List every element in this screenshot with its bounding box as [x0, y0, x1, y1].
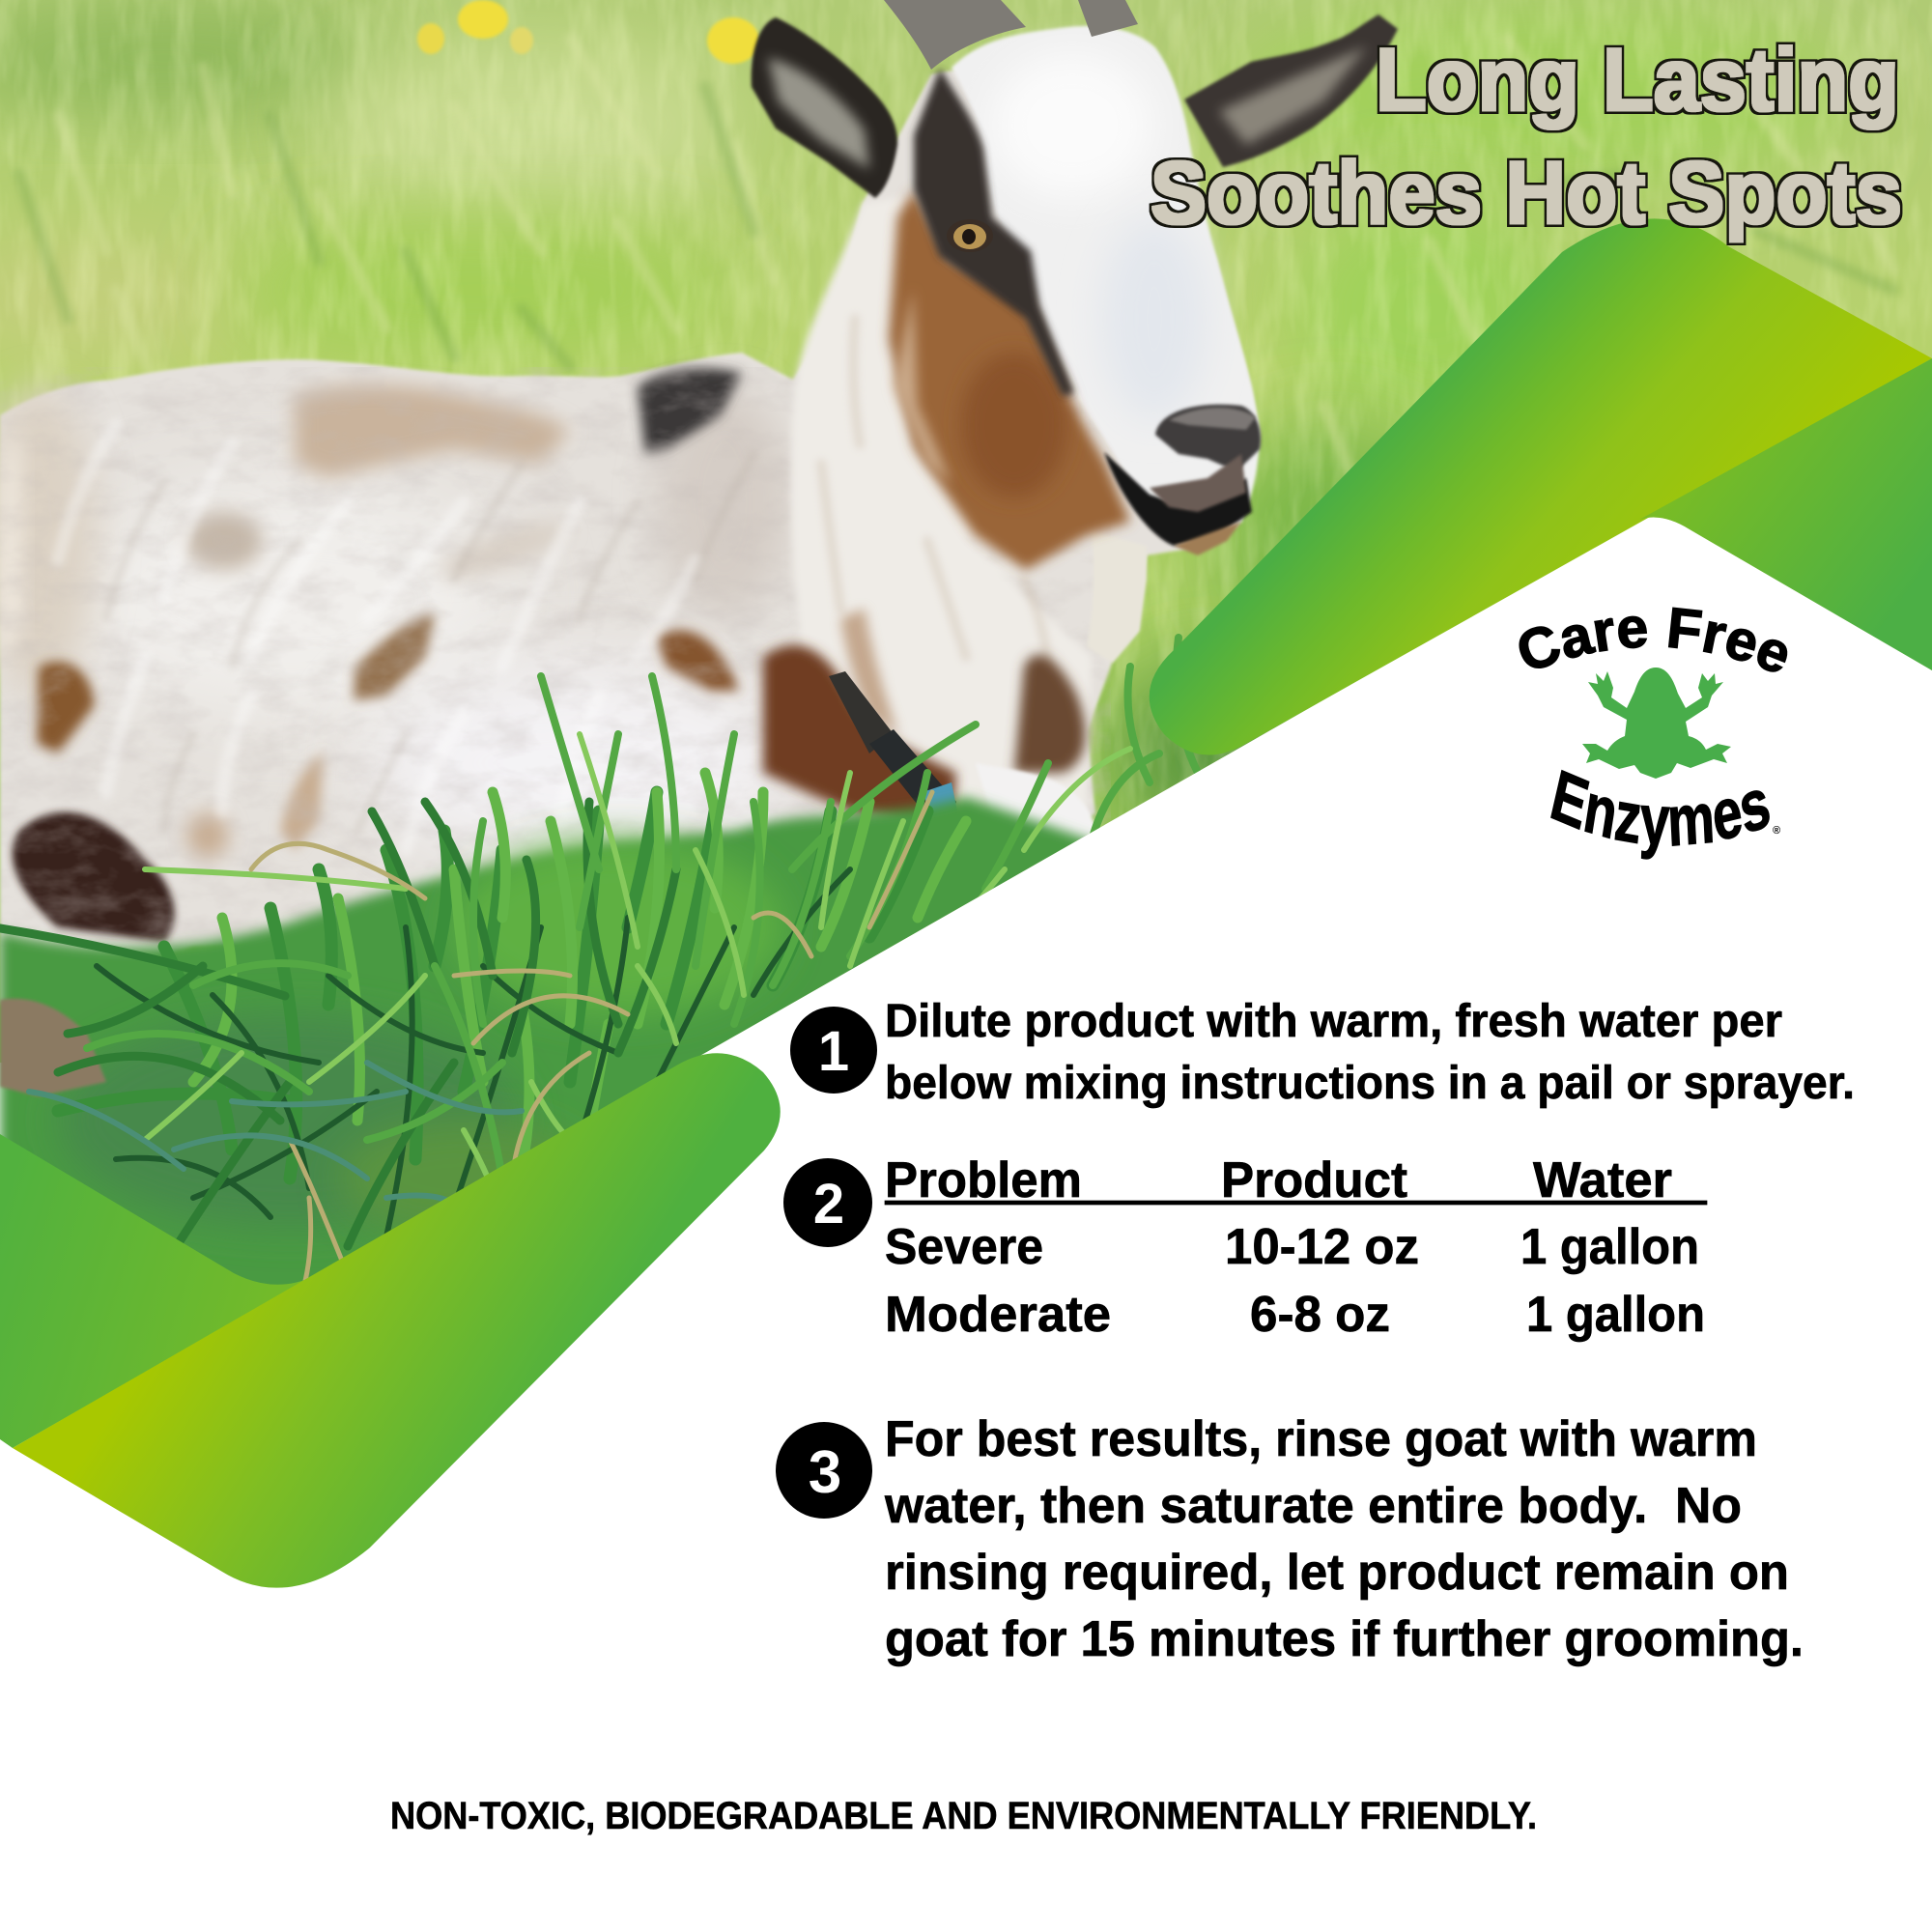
step 1 text: below mixing instructions in a pail or sprayer.	[885, 1058, 1855, 1109]
number badge 1	[790, 1007, 877, 1094]
title: Long Lasting	[1376, 31, 1899, 129]
mixing table: Problem	[885, 1152, 1082, 1208]
photo: goat lying in grass	[0, 0, 1932, 1352]
step 1 text: Dilute product with warm, fresh water per	[885, 996, 1782, 1047]
mixing table: Severe	[885, 1219, 1043, 1275]
mixing table: Moderate	[885, 1287, 1111, 1343]
step 1 text	[885, 996, 1855, 1109]
goat neck and chest	[763, 193, 1147, 860]
step 3 text: For best results, rinse goat with warm	[885, 1411, 1757, 1467]
foreground grass	[0, 638, 1198, 1352]
goat right ear	[1184, 14, 1398, 167]
green shape: lower bright chevron	[13, 1053, 781, 1588]
green shape: lower left band	[0, 1134, 314, 1448]
goat body	[0, 39, 1260, 1005]
registered mark: ®	[1773, 825, 1780, 837]
number badge 2: 2	[813, 1173, 844, 1236]
step 3	[776, 1411, 1804, 1667]
mixing table: 6-8 oz	[1250, 1287, 1390, 1343]
title	[1151, 31, 1902, 242]
mixing table: 10-12 oz	[1225, 1219, 1419, 1275]
number badge 2	[783, 1158, 872, 1247]
icon: frog	[1582, 668, 1731, 779]
goat horns	[884, 0, 1138, 70]
eye	[953, 224, 986, 249]
grass background	[0, 0, 1932, 1063]
mixing table: Water	[1533, 1152, 1672, 1208]
step 2	[783, 1152, 1707, 1343]
number badge 1: 1	[818, 1020, 849, 1083]
title: Soothes Hot Spots	[1151, 144, 1902, 242]
goat hind leg	[0, 999, 106, 1096]
step 1	[790, 996, 1855, 1109]
logo: Care Free Enzymes	[1519, 607, 1787, 860]
mixing table	[885, 1152, 1707, 1343]
number badge 3: 3	[809, 1439, 841, 1506]
mixing table: 1 gallon	[1520, 1219, 1699, 1275]
fur streaks	[58, 425, 696, 850]
footer note: NON-TOXIC, BIODEGRADABLE AND ENVIRONMENTALLY FRIENDLY.	[390, 1795, 1537, 1837]
goat left ear	[752, 17, 897, 198]
step 3 text	[884, 1411, 1804, 1667]
step 3 text: water, then saturate entire body. No	[884, 1478, 1742, 1534]
green shape: upper right band	[1639, 358, 1932, 670]
step 3 text: rinsing required, let product remain on	[885, 1545, 1789, 1601]
mixing table: Product	[1221, 1152, 1407, 1208]
logo text: Care Free: Care Free	[1519, 607, 1787, 672]
goat head	[889, 26, 1261, 570]
step 3 text: goat for 15 minutes if further grooming.	[885, 1611, 1804, 1667]
wide blades	[58, 792, 927, 1179]
yellow flowers	[417, 0, 759, 64]
mixing table: 1 gallon	[1526, 1287, 1705, 1343]
logo text: Enzymes: Enzymes	[1550, 769, 1770, 860]
green shape: upper bright chevron	[1150, 218, 1932, 754]
number badge 3	[776, 1422, 872, 1519]
